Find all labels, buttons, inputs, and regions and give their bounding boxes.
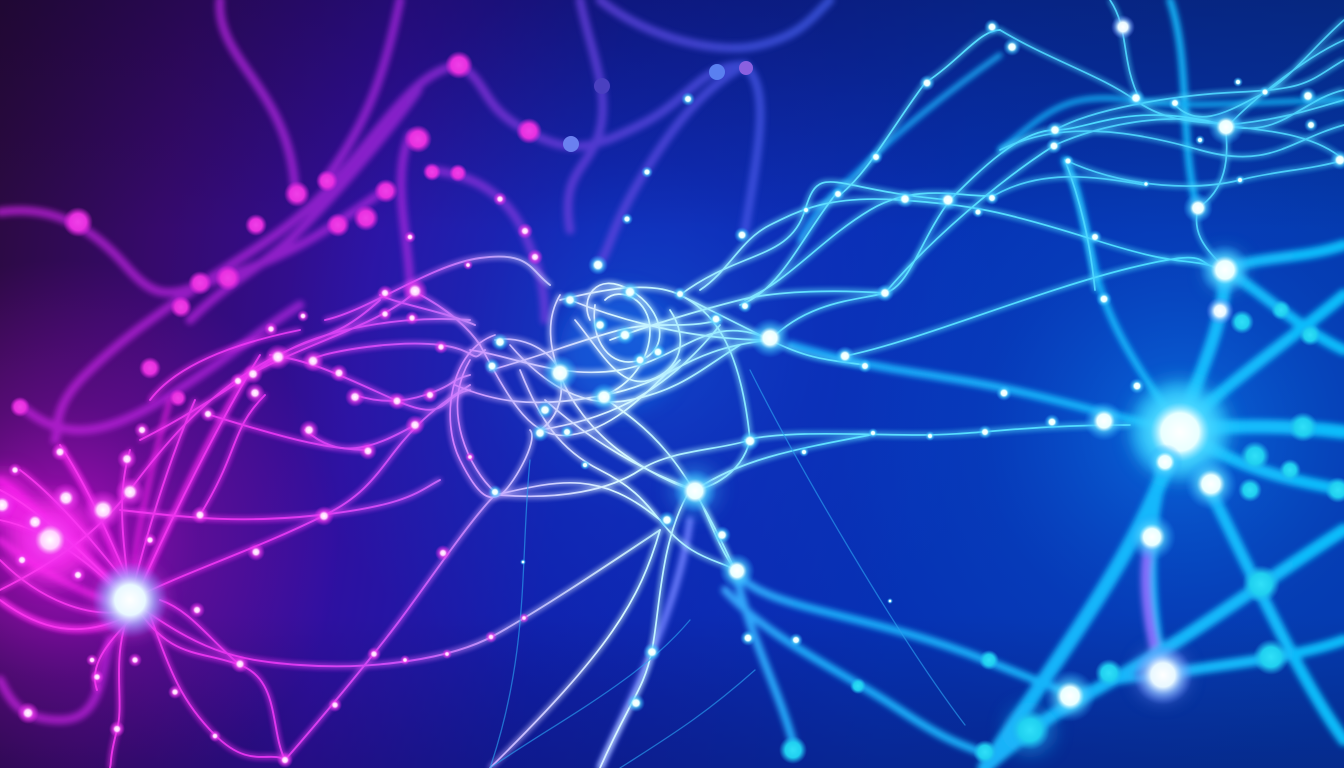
nodes: magenta out-of-focus	[10, 51, 542, 417]
far out-of-focus purple strands	[0, 0, 830, 720]
fine strands: central knot	[450, 30, 1225, 768]
thick left magenta strands	[0, 370, 250, 629]
nodes: small bright beads in the centre	[484, 19, 1344, 712]
nodes: cyan out-of-focus	[563, 61, 1344, 764]
nodes: small bright beads on the left	[8, 192, 543, 768]
fine strands: magenta left cluster	[0, 257, 660, 768]
soft glow halos	[0, 254, 1241, 752]
fine strands: upper right web	[995, 0, 1344, 290]
fine strands: thin faint lines	[490, 370, 965, 768]
thick right cyan strands	[600, 0, 1344, 768]
